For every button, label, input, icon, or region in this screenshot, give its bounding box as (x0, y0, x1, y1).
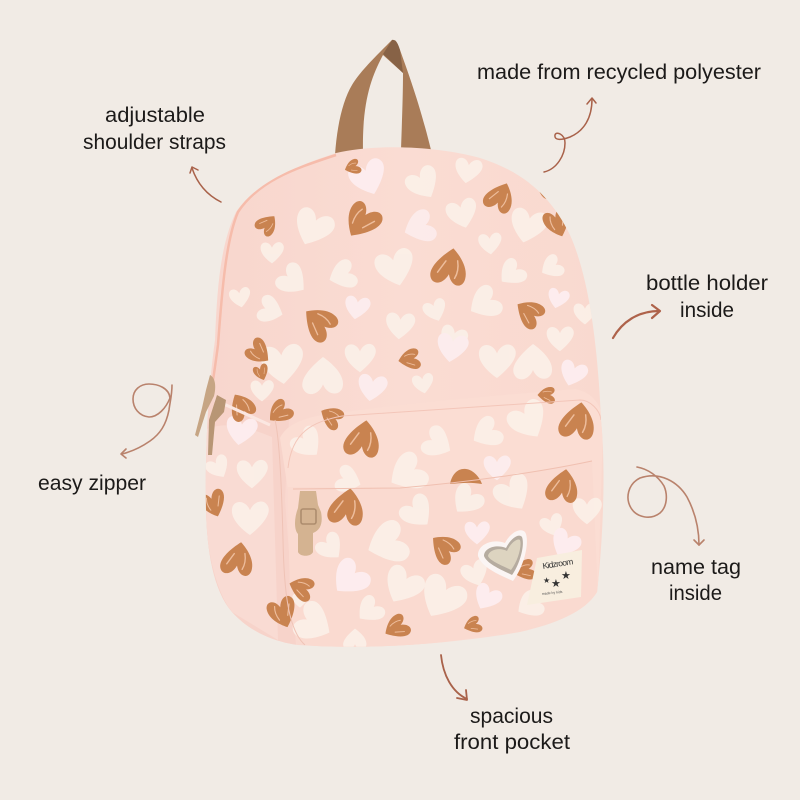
backpack illustration (195, 40, 604, 650)
bag body (206, 147, 604, 647)
label: made from recycled polyester: made from recycled polyester (477, 61, 761, 84)
pocket seams (288, 400, 601, 468)
arrow: bottle holder (613, 305, 660, 338)
pocket zipper pull (295, 491, 322, 556)
white hearts (203, 156, 602, 650)
label: bottle holder inside: inside (680, 299, 734, 322)
name label patch: ★ (543, 576, 550, 585)
label: spacious front pocket (454, 705, 570, 754)
arrow: shoulder straps (190, 167, 221, 202)
label: adjustable shoulder straps: adjustable (105, 104, 205, 127)
label: bottle holder inside: bottle holder (646, 272, 768, 295)
arrow: recycled polyester (544, 98, 596, 172)
label: name tag inside: inside (669, 582, 722, 605)
pocket lower flap (288, 460, 598, 648)
label: bottle holder inside (646, 272, 768, 322)
arrow: easy zipper (121, 384, 172, 458)
heart patch (478, 530, 527, 581)
label: spacious front pocket: front pocket (454, 731, 570, 754)
arrow: spacious front pocket (441, 655, 467, 700)
brown hearts (198, 158, 598, 644)
label: easy zipper: easy zipper (38, 472, 146, 495)
name label patch: Kidzroom (542, 556, 574, 571)
name label patch: ★ (561, 569, 571, 582)
zipper (212, 155, 336, 386)
label: name tag inside (651, 556, 741, 605)
main zipper pull (195, 375, 226, 455)
name label patch (527, 550, 582, 605)
side gusset (244, 624, 294, 644)
front pocket (280, 428, 288, 474)
name label patch: made by kids (542, 590, 563, 596)
handle (335, 40, 431, 155)
arrow: name tag (628, 467, 704, 545)
label: spacious front pocket: spacious (470, 705, 553, 728)
name label patch: ★ (551, 577, 561, 590)
label: name tag inside: name tag (651, 556, 741, 579)
side pocket (205, 425, 278, 640)
label: adjustable shoulder straps: shoulder straps (83, 131, 226, 154)
label: adjustable shoulder straps (83, 104, 226, 154)
